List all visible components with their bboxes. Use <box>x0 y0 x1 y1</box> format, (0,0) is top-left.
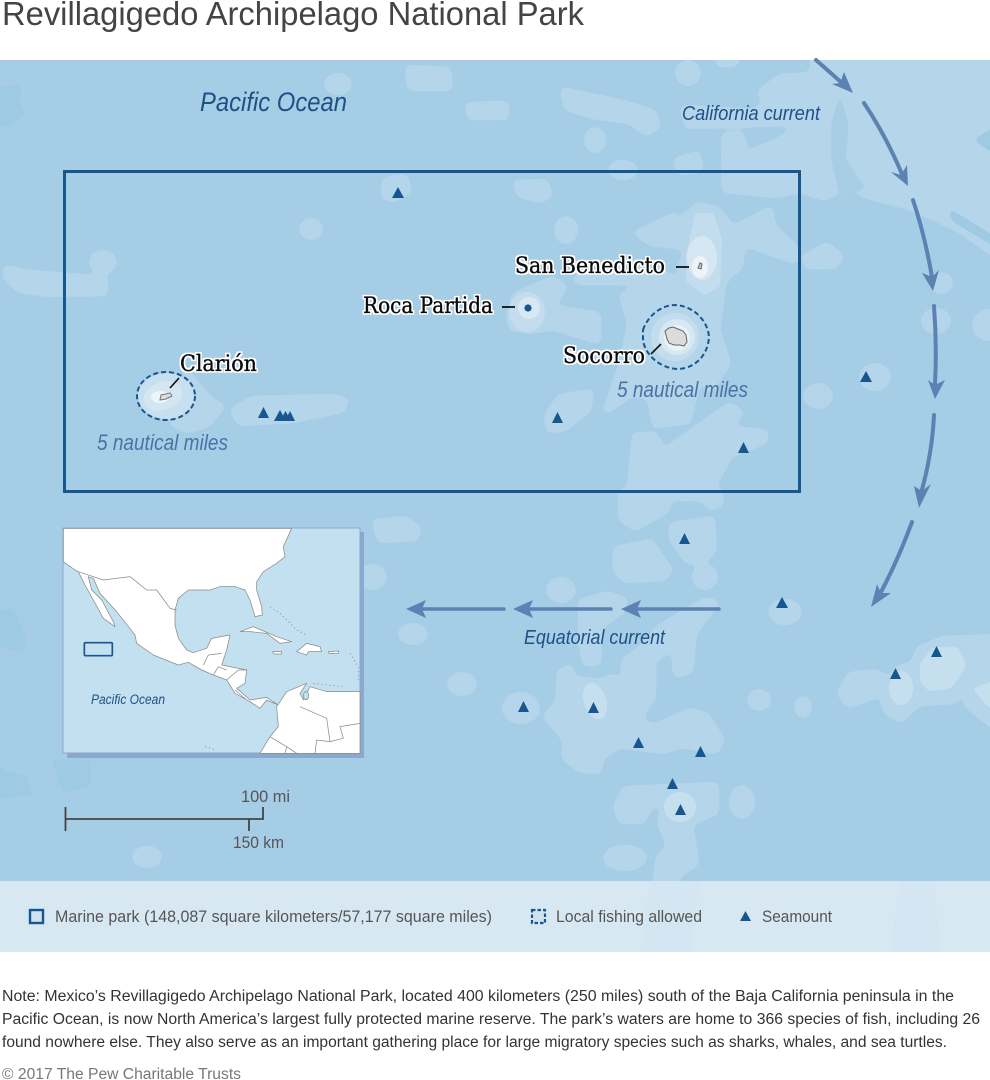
seamount triangles <box>258 187 942 815</box>
North and Central America land <box>63 528 292 708</box>
fishing zone: Clarión <box>137 372 195 420</box>
legend <box>0 881 990 952</box>
fishing zone: Socorro <box>643 305 709 369</box>
ocean and current labels: Equatorial current <box>524 627 666 649</box>
island labels: Roca Partida <box>363 294 493 319</box>
note text: found nowhere else. They also serve as an important gathering place for large migratory species such as sharks, whales, and sea turtles. <box>2 1034 947 1051</box>
island labels: Clarión <box>180 352 257 377</box>
island labels: Socorro <box>563 344 645 369</box>
note text: Note: Mexico’s Revillagigedo Archipelago National Park, located 400 kilometers (250 miles) south of the Baja California peninsula in the <box>2 988 954 1005</box>
Equatorial current arrows <box>406 600 719 618</box>
island labels: San Benedicto <box>515 254 665 279</box>
country borders <box>78 572 360 753</box>
island labels <box>180 254 665 377</box>
Cuba and Caribbean islands <box>240 627 292 643</box>
ocean and current labels: Pacific Ocean <box>200 87 347 117</box>
park locator rectangle <box>84 643 112 656</box>
map: ocean background with bathymetry <box>0 45 990 900</box>
San Benedicto island with glow <box>676 215 720 293</box>
note text <box>2 988 980 1051</box>
scale bar: 100 mi <box>241 787 290 806</box>
inset locator map <box>63 528 364 758</box>
scale bar: 150 km <box>233 833 284 852</box>
legend: marine park: Marine park (148,087 square kilometers/57,177 square miles) <box>55 908 492 926</box>
note text: Pacific Ocean, is now North America’s largest fully protected marine reserve. The park’s waters are home to 366 species of fish, including 26 <box>2 1011 980 1028</box>
Clarión island with glow <box>138 373 194 419</box>
Roca Partida marker with glow <box>502 292 545 332</box>
top right light region <box>681 60 990 255</box>
ocean and current labels: 5 nautical miles <box>617 377 748 402</box>
Socorro island with glow <box>651 313 699 361</box>
ocean and current labels: 5 nautical miles <box>97 430 228 455</box>
ocean and current labels <box>97 87 821 649</box>
legend: local fishing: Local fishing allowed <box>556 908 702 926</box>
ocean and current labels: California current <box>682 103 821 125</box>
scale bar <box>65 787 290 852</box>
South America land <box>260 683 360 753</box>
deep water patches and shallower overlays <box>0 87 990 822</box>
inset locator map: Pacific Ocean <box>91 692 165 707</box>
legend: seamount: Seamount <box>762 908 832 926</box>
California current arrows <box>816 60 945 607</box>
marine park boundary <box>64 172 800 492</box>
